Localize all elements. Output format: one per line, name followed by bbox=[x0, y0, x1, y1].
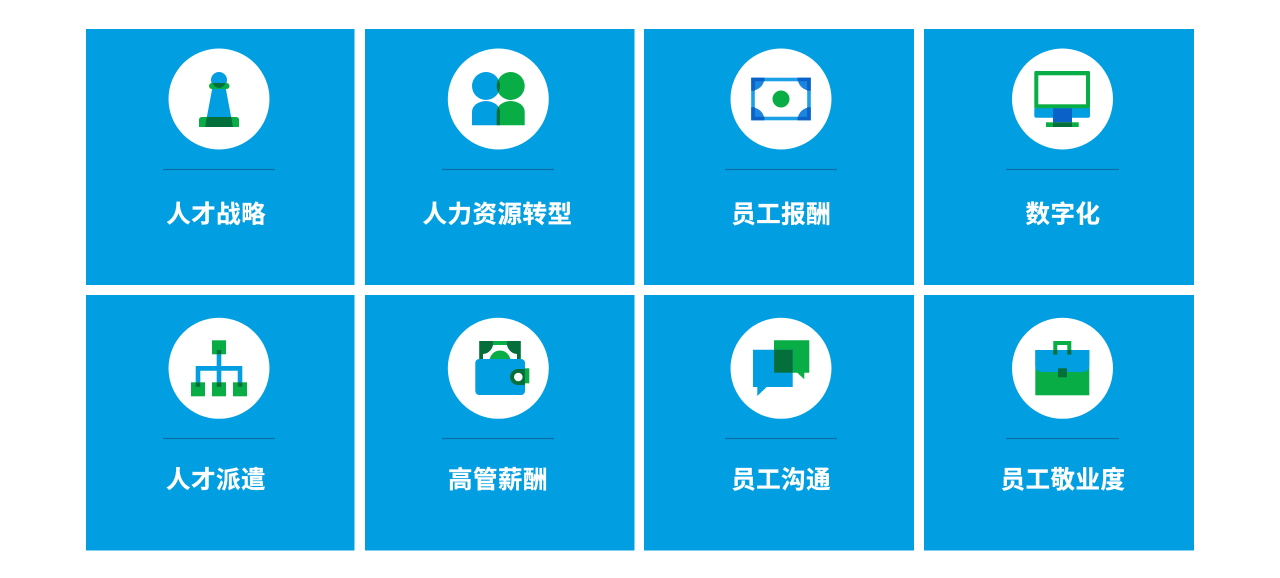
icon: wallet with cash bbox=[448, 318, 549, 419]
label: 人力资源转型: 人力资源转型 bbox=[422, 200, 572, 228]
infographic grid bbox=[86, 29, 1194, 550]
panel: 员工敬业度 bbox=[924, 295, 1194, 550]
panel: 数字化 bbox=[924, 29, 1194, 285]
panel: 高管薪酬 bbox=[365, 295, 634, 550]
panel: 员工报酬 bbox=[644, 29, 914, 285]
label: 员工敬业度: 员工敬业度 bbox=[1000, 466, 1126, 494]
icon: briefcase bbox=[1012, 318, 1113, 419]
panel: 人力资源转型 bbox=[365, 29, 634, 285]
panel: 员工沟通 bbox=[644, 295, 914, 550]
icon: speech bubbles bbox=[730, 318, 832, 419]
label: 人才战略: 人才战略 bbox=[166, 200, 266, 228]
icon: banknote bbox=[730, 48, 832, 150]
panel: 人才战略 bbox=[86, 29, 354, 285]
label: 员工沟通: 员工沟通 bbox=[731, 466, 831, 494]
panel: 人才派遣 bbox=[86, 295, 354, 550]
icon: two people bbox=[448, 48, 549, 150]
icon: monitor bbox=[1012, 48, 1113, 150]
icon: chess pawn bbox=[168, 48, 270, 150]
label: 员工报酬: 员工报酬 bbox=[731, 200, 831, 228]
icon: organisation chart bbox=[168, 318, 270, 419]
label: 人才派遣: 人才派遣 bbox=[166, 466, 266, 494]
label: 高管薪酬: 高管薪酬 bbox=[448, 466, 548, 494]
label: 数字化: 数字化 bbox=[1026, 200, 1100, 228]
